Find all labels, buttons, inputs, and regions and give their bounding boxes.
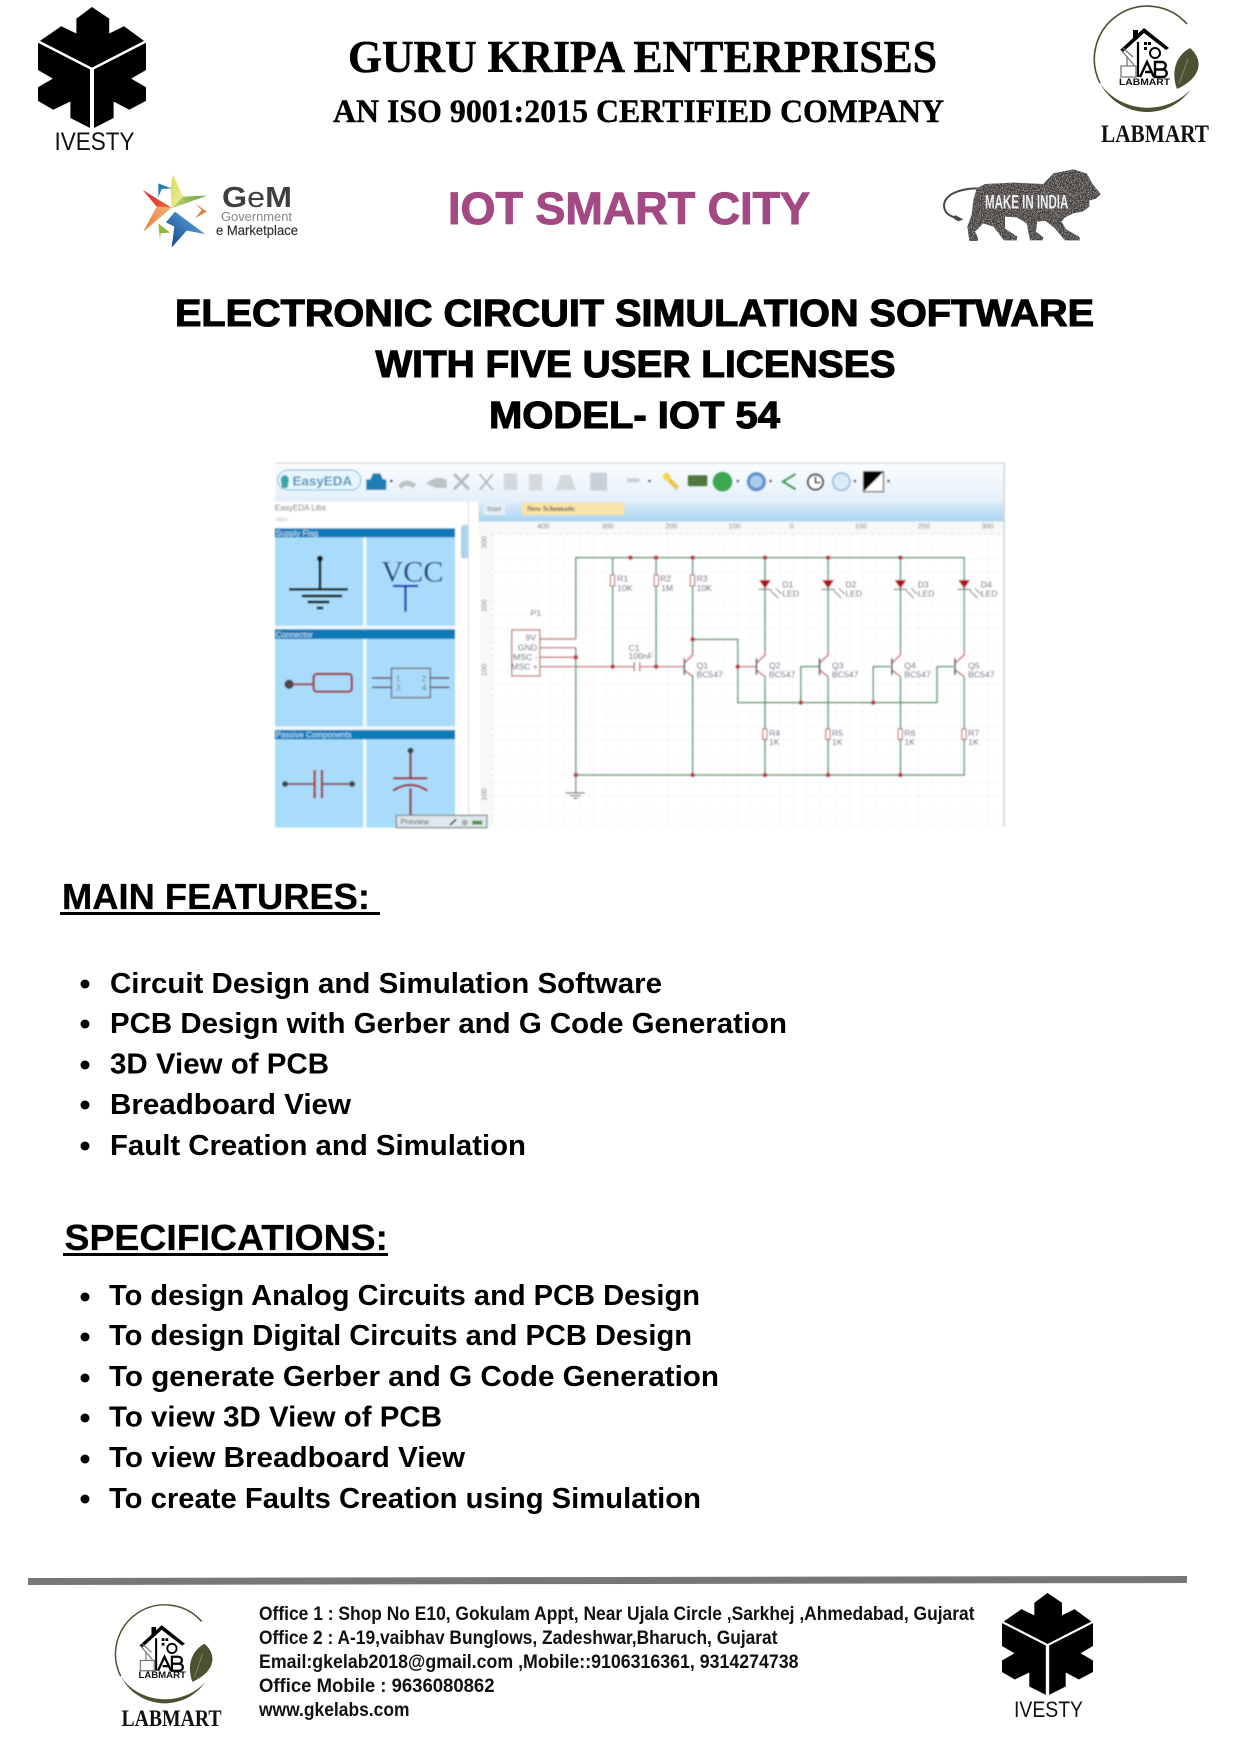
list: main features bbox=[80, 968, 787, 1162]
canvas with grid: 400 bbox=[537, 521, 550, 530]
footer contact details bbox=[258, 1604, 975, 1721]
LEDs: D3 bbox=[918, 580, 929, 590]
list: specifications bbox=[80, 1280, 719, 1515]
transistors: Q3 bbox=[832, 660, 844, 670]
heading: product title: ELECTRONIC CIRCUIT SIMULATION SOFTWARE bbox=[175, 293, 1094, 335]
logo: Ivesty top left: IVESTY bbox=[54, 128, 135, 156]
footer contact details: Office 1 : Shop No E10, Gokulam Appt, Near Ujala Circle ,Sarkhej ,Ahmedabad, Gujarat bbox=[259, 1604, 975, 1625]
LEDs: D4 bbox=[981, 580, 992, 590]
logo: Labmart footer: LABMART bbox=[138, 1670, 187, 1680]
resistor labels: R6 bbox=[904, 728, 916, 738]
logo: Ivesty footer: IVESTY bbox=[1014, 1697, 1083, 1722]
heading: product title: WITH FIVE USER LICENSES bbox=[376, 344, 896, 386]
icon: VCC symbol bbox=[381, 555, 443, 612]
list: specifications: To generate Gerber and G Code Generation bbox=[109, 1361, 719, 1393]
ruler numbers: 200 bbox=[665, 521, 678, 530]
icon: IC symbol bbox=[372, 668, 449, 698]
LEDs: LED bbox=[981, 588, 998, 598]
icon: IC symbol: 3 bbox=[396, 683, 401, 693]
library panel bbox=[275, 502, 469, 828]
capacitor C1 bbox=[629, 643, 653, 671]
ruler numbers: 100 bbox=[728, 521, 741, 530]
ruler numbers: 300 bbox=[981, 521, 994, 530]
logo: Ivesty footer bbox=[1002, 1593, 1093, 1722]
tab strip: Start bbox=[487, 506, 501, 513]
icon: GeM star bbox=[143, 174, 207, 248]
logo: Make in India lion: MAKE IN INDIA bbox=[985, 192, 1068, 213]
circuit wires bbox=[640, 555, 964, 777]
footer contact details: Email:gkelab2018@gmail.com ,Mobile::9106316361, 9314274738 bbox=[259, 1652, 798, 1673]
transistors: BC547 bbox=[904, 669, 931, 679]
icon: IC symbol: 1 bbox=[396, 674, 401, 684]
LEDs: D1 bbox=[782, 580, 793, 590]
ruler numbers: 100 bbox=[855, 521, 867, 530]
resistor labels: 1K bbox=[832, 737, 843, 747]
resistor labels: 1K bbox=[968, 737, 979, 747]
resistor labels: R2 bbox=[660, 574, 671, 584]
logo label: Labmart: LABMART bbox=[1101, 121, 1209, 148]
list: main features: Breadboard View bbox=[110, 1089, 351, 1121]
logo label: Labmart footer: LABMART bbox=[122, 1706, 222, 1731]
footer divider bbox=[28, 1576, 1187, 1585]
subtitle: certification: AN ISO 9001:2015 CERTIFIED COMPANY bbox=[333, 94, 944, 130]
logo: Make in India lion bbox=[944, 169, 1101, 241]
resistors bbox=[654, 575, 966, 739]
library panel: EasyEDA Libs bbox=[275, 504, 326, 513]
LEDs: LED bbox=[845, 588, 862, 598]
transistors bbox=[684, 650, 995, 679]
resistor labels bbox=[660, 574, 979, 747]
connector P1: 9V bbox=[526, 633, 536, 643]
footer contact details: Office Mobile : 9636080862 bbox=[259, 1676, 494, 1697]
wires left section bbox=[566, 555, 641, 798]
resistor labels: 10K bbox=[697, 583, 712, 593]
LEDs: D2 bbox=[845, 580, 857, 590]
heading: IOT Smart City: IOT SMART CITY bbox=[448, 183, 810, 234]
canvas with grid: 100 bbox=[479, 664, 488, 676]
list: main features: Circuit Design and Simulation Software bbox=[110, 968, 662, 1000]
preview box bbox=[396, 815, 487, 828]
heading: product title: MODEL- IOT 54 bbox=[489, 395, 780, 437]
canvas with grid: 100 bbox=[479, 788, 488, 801]
icon: IC symbol: 4 bbox=[422, 683, 427, 693]
icon: IC symbol: 2 bbox=[422, 674, 427, 684]
icon: ground symbol bbox=[289, 557, 348, 608]
logo: EasyEDA pill: EasyEDA bbox=[292, 474, 352, 488]
transistors: BC547 bbox=[968, 669, 995, 679]
tab strip: New Schematic bbox=[527, 504, 576, 513]
section heading: main features: MAIN FEATURES: bbox=[62, 876, 370, 917]
resistor labels: 1M bbox=[661, 583, 673, 593]
tab strip bbox=[484, 502, 624, 515]
resistor labels: R3 bbox=[697, 574, 708, 584]
wires left section: 10K bbox=[617, 583, 633, 593]
library panel: Passive Components bbox=[276, 731, 352, 740]
logo: Ivesty top left bbox=[38, 7, 146, 156]
preview box: Preview bbox=[400, 818, 429, 827]
footer contact details: Office 2 : A-19,vaibhav Bunglows, Zadeshwar,Bharuch, Gujarat bbox=[259, 1628, 778, 1649]
toolbar icons bbox=[648, 472, 890, 492]
list: main features: PCB Design with Gerber and G Code Generation bbox=[110, 1008, 787, 1040]
section heading: specifications: SPECIFICATIONS: bbox=[64, 1217, 388, 1258]
canvas with grid bbox=[479, 521, 641, 828]
transistors: Q1 bbox=[697, 660, 708, 670]
ruler numbers: 0 bbox=[790, 521, 794, 530]
icon: polar capacitor symbol bbox=[393, 748, 427, 815]
icon: connector symbol bbox=[284, 674, 352, 692]
library panel: Supply Flag bbox=[276, 529, 318, 538]
transistors: BC547 bbox=[832, 669, 859, 679]
resistor labels: R7 bbox=[968, 728, 979, 738]
logo: EasyEDA pill bbox=[278, 470, 361, 490]
list: specifications: To view Breadboard View bbox=[109, 1442, 465, 1474]
list: specifications: To view 3D View of PCB bbox=[109, 1402, 442, 1434]
transistors: Q2 bbox=[769, 660, 781, 670]
left half of screenshot bbox=[275, 463, 641, 828]
library panel: filter bbox=[276, 517, 288, 523]
resistor labels: R4 bbox=[769, 728, 780, 738]
connector P1: MSC - bbox=[513, 652, 538, 662]
icon: capacitor symbol bbox=[282, 770, 355, 798]
connector P1 bbox=[511, 608, 634, 676]
resistor labels: 1K bbox=[769, 737, 780, 747]
connector P1: P1 bbox=[531, 608, 541, 618]
transistors: BC547 bbox=[697, 669, 723, 679]
capacitor C1: C1 bbox=[629, 643, 640, 653]
transistors: BC547 bbox=[769, 669, 796, 679]
logo: Labmart footer bbox=[116, 1605, 212, 1703]
heading: product title bbox=[175, 293, 1094, 437]
LEDs bbox=[758, 580, 998, 598]
resistor labels: 1K bbox=[904, 737, 915, 747]
list: specifications: To design Analog Circuits and PCB Design bbox=[109, 1280, 700, 1312]
list: main features: Fault Creation and Simulation bbox=[110, 1130, 526, 1162]
transistors: Q5 bbox=[968, 660, 980, 670]
connector P1: GND bbox=[518, 643, 537, 653]
icon: VCC symbol: VCC bbox=[381, 555, 443, 589]
ruler numbers: 200 bbox=[918, 521, 930, 530]
logo: Labmart top right bbox=[1094, 6, 1199, 112]
transistors: Q4 bbox=[904, 660, 916, 670]
capacitor C1: 100nF bbox=[629, 651, 653, 661]
library panel: Connector bbox=[276, 630, 313, 639]
canvas with grid: 300 bbox=[479, 536, 488, 548]
LEDs: LED bbox=[918, 588, 934, 598]
list: specifications: To create Faults Creation using Simulation bbox=[109, 1483, 701, 1515]
connector P1: MSC + bbox=[511, 661, 538, 671]
canvas with grid: 300 bbox=[602, 521, 614, 530]
logo: GeM bbox=[143, 174, 298, 248]
list: specifications: To design Digital Circuits and PCB Design bbox=[109, 1320, 692, 1352]
list: main features: 3D View of PCB bbox=[110, 1048, 329, 1080]
LEDs: LED bbox=[782, 588, 799, 598]
right half of screenshot bbox=[629, 463, 1005, 828]
wires left section: R1 bbox=[617, 574, 628, 584]
screenshot: EasyEDA schematic editor bbox=[275, 463, 1005, 828]
logo: GeM: e Marketplace bbox=[216, 222, 298, 238]
resistor labels: R5 bbox=[832, 728, 843, 738]
title: company name: GURU KRIPA ENTERPRISES bbox=[348, 32, 937, 82]
ruler numbers bbox=[665, 521, 994, 530]
footer contact details: www.gkelabs.com bbox=[258, 1700, 410, 1721]
canvas with grid: 200 bbox=[479, 599, 488, 612]
logo: Labmart top right: LABMART bbox=[1119, 77, 1170, 88]
logo: GeM: Government bbox=[221, 209, 292, 224]
logo: GeM: GeM bbox=[222, 182, 292, 214]
